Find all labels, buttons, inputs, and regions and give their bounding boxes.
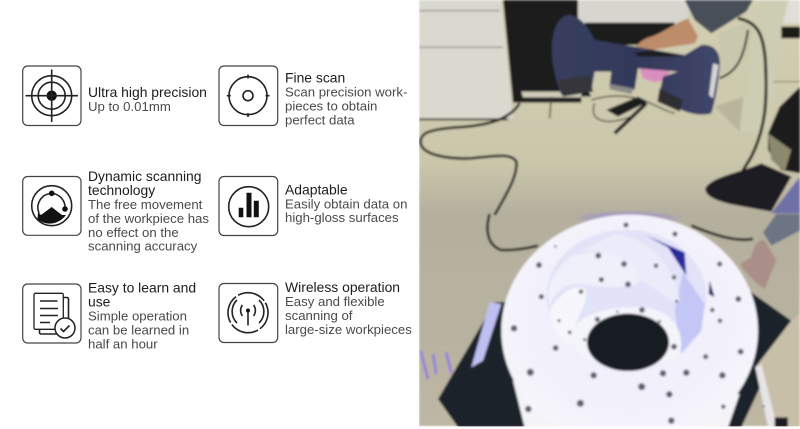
photo: scanner over white impeller (419, 0, 800, 429)
panel: feature: adaptable (219, 176, 407, 236)
text: ultra high precision: Up to 0.01mm (88, 99, 171, 114)
text: dynamic scanning technology: no effect on the (88, 225, 179, 240)
icon: scan circle (219, 66, 278, 126)
text: dynamic scanning technology: of the workpiece has (88, 211, 209, 226)
text: dynamic scanning technology: technology (88, 182, 155, 198)
text: dynamic scanning technology: Dynamic scanning (88, 168, 202, 184)
text: dynamic scanning technology: scanning accuracy (88, 238, 198, 254)
central hole (587, 314, 669, 371)
text: easy to learn and use: Easy to learn and (88, 280, 196, 296)
text: fine scan: pieces to obtain (285, 98, 377, 114)
cables on floor (421, 103, 520, 215)
text: wireless operation: Easy and flexible (285, 294, 385, 309)
impeller blades (548, 252, 640, 303)
text: wireless operation: Wireless operation (285, 279, 400, 295)
text: adaptable: Easily obtain data on (285, 196, 407, 212)
impeller outer ring (499, 213, 760, 396)
scanning marker dots (511, 222, 765, 424)
panel: feature: easy to learn and use (23, 280, 196, 352)
panel: feature: dynamic scanning technology (23, 168, 209, 254)
icon: documents with check (23, 284, 81, 343)
text: dynamic scanning technology: The free movement (88, 197, 203, 212)
blue scan light on floor (578, 211, 678, 221)
text: wireless operation: scanning of (285, 308, 353, 323)
text: easy to learn and use: half an hour (88, 336, 158, 352)
text: adaptable: high-gloss surfaces (285, 210, 399, 225)
icon: dynamic scanning (23, 176, 81, 235)
text: fine scan: perfect data (285, 112, 355, 128)
text: ultra high precision: Ultra high precision (88, 84, 207, 100)
text: easy to learn and use: use (88, 294, 111, 310)
panel: feature: fine scan (219, 66, 407, 128)
text: easy to learn and use: Simple operation (88, 308, 187, 324)
impeller inner opening (547, 230, 706, 324)
scanner body (552, 15, 720, 115)
text: easy to learn and use: can be learned in (88, 322, 189, 338)
text: fine scan: Scan precision work- (285, 84, 407, 100)
dark mat (438, 292, 791, 427)
impeller lower body (513, 381, 740, 427)
icon: wireless signal (219, 284, 278, 342)
text: adaptable: Adaptable (285, 182, 348, 198)
icon: bar chart circle (219, 176, 278, 236)
text: fine scan: Fine scan (285, 70, 345, 86)
text: wireless operation: large-size workpieces (285, 322, 412, 337)
person leg and shoe (768, 87, 800, 173)
panel: feature: wireless operation (219, 279, 412, 342)
panel: feature: ultra high precision (23, 66, 207, 126)
icon: target crosshair (23, 66, 81, 126)
